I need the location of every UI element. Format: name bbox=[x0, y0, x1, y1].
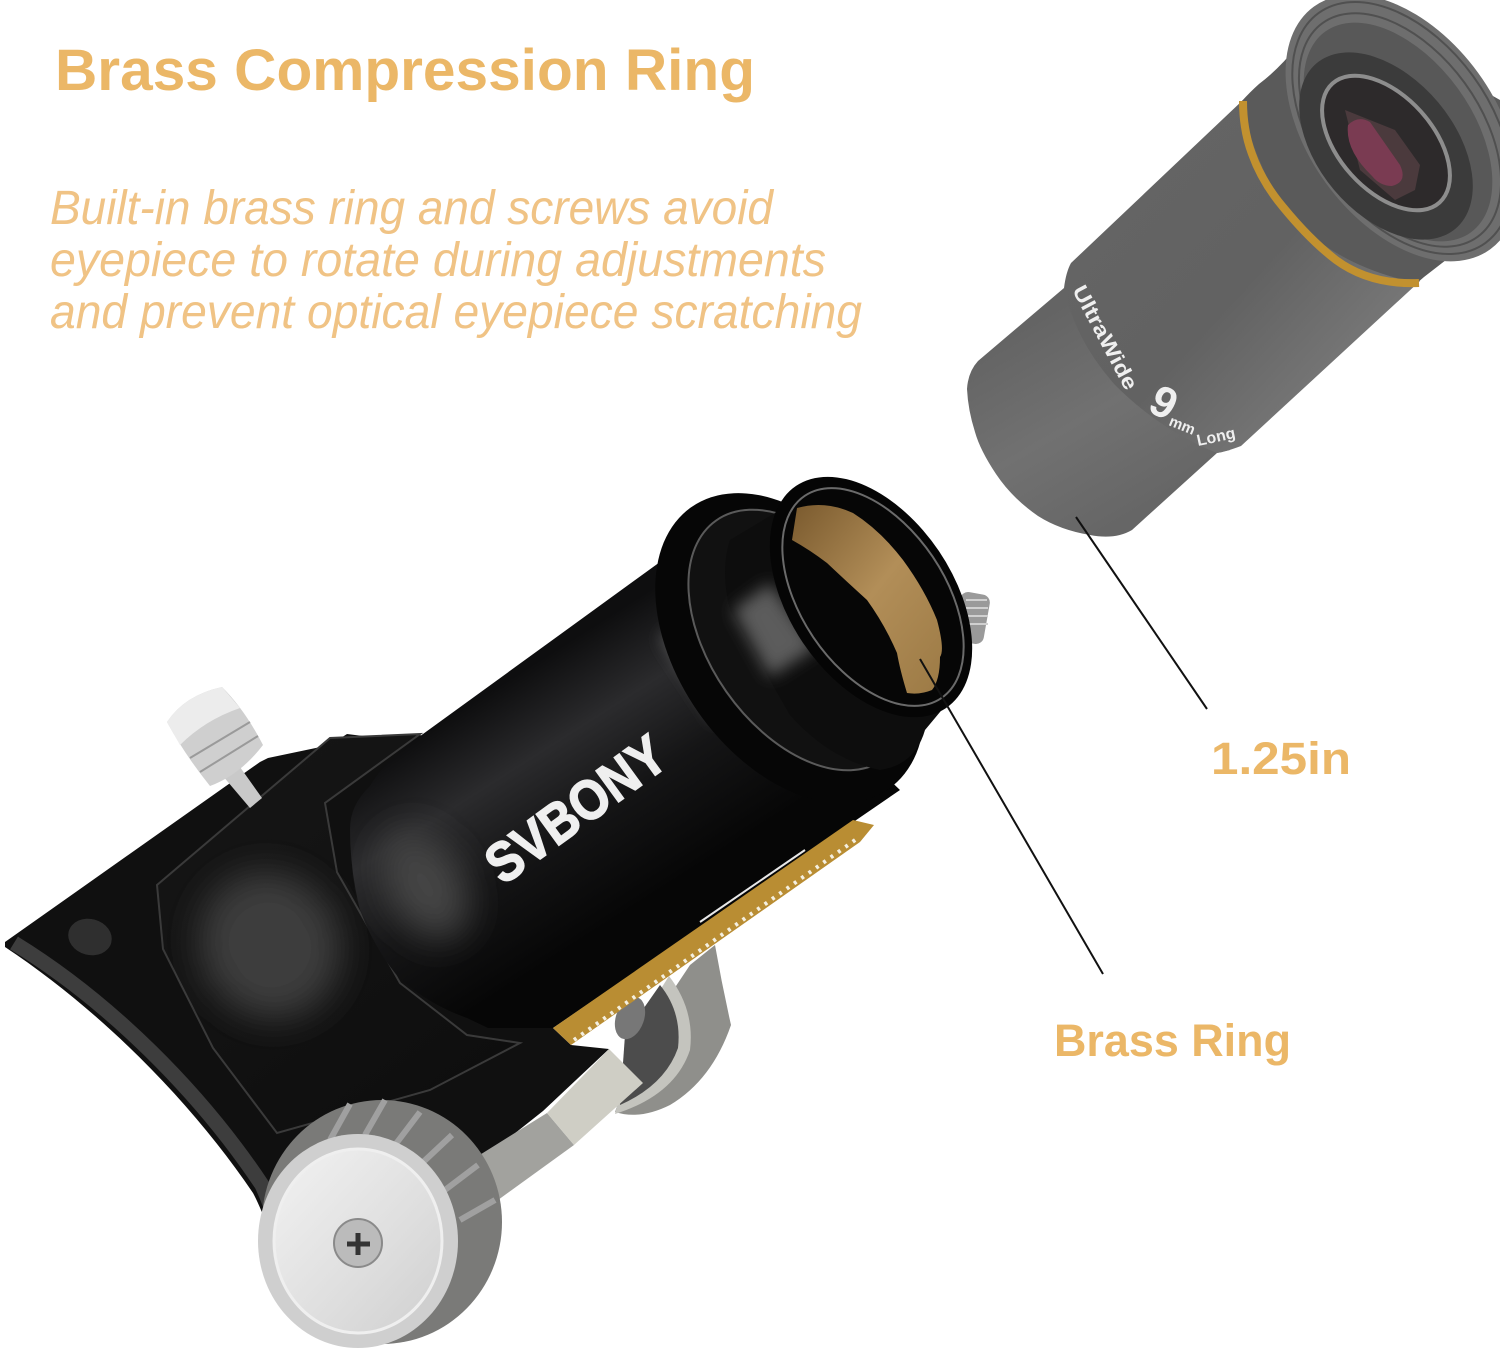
brass ring pointer line bbox=[920, 659, 1103, 974]
lens glass bbox=[1345, 110, 1420, 200]
metal bracket bbox=[478, 1049, 643, 1200]
flange collar bbox=[600, 443, 980, 853]
tube flange highlight bbox=[660, 618, 748, 722]
tube rear highlight bbox=[363, 816, 487, 954]
base casting bbox=[5, 734, 609, 1316]
eyepiece markings: Long bbox=[1195, 425, 1237, 450]
top thumb screw bbox=[167, 687, 263, 808]
collar barrel bbox=[725, 510, 950, 770]
front knob bbox=[258, 1100, 502, 1348]
description text bbox=[50, 182, 862, 339]
inner cup bbox=[1264, 20, 1500, 272]
eyepiece markings: UltraWide bbox=[1068, 282, 1142, 394]
screw hole bbox=[64, 914, 116, 960]
focuser illustration bbox=[5, 440, 1014, 1316]
brass ring label: Brass Ring bbox=[1054, 1015, 1291, 1066]
base edge band bbox=[14, 943, 300, 1312]
1.25in pointer line bbox=[1076, 517, 1207, 709]
lens reflection bbox=[1348, 119, 1403, 186]
brass ring bbox=[792, 505, 942, 694]
tube bbox=[350, 562, 900, 1028]
lower barrel bbox=[967, 288, 1230, 537]
side screw bbox=[953, 591, 991, 645]
rack gear bbox=[553, 820, 874, 1045]
rear knob bbox=[609, 945, 731, 1115]
description text: and prevent optical eyepiece scratching bbox=[50, 286, 862, 339]
eyepiece markings: 9 bbox=[1141, 376, 1186, 430]
eyepiece markings bbox=[1068, 282, 1237, 450]
eyepiece illustration bbox=[967, 0, 1500, 537]
top collar ring bbox=[728, 440, 1014, 754]
description text: Built-in brass ring and screws avoid bbox=[50, 182, 774, 235]
eyepiece markings: mm bbox=[1167, 413, 1198, 439]
description text: eyepiece to rotate during adjustments bbox=[50, 234, 826, 287]
rubber eyecup bbox=[1241, 4, 1500, 283]
collar highlight bbox=[733, 583, 817, 677]
title: Brass Compression Ring bbox=[55, 38, 755, 103]
SVBONY logo: SVBONY bbox=[473, 722, 678, 896]
lens ring bbox=[1298, 52, 1474, 234]
ring highlight bbox=[745, 456, 1001, 738]
eyecup ribs bbox=[1238, 0, 1500, 305]
1.25in label: 1.25in bbox=[1211, 733, 1351, 784]
casting highlight bbox=[172, 845, 368, 1045]
main barrel bbox=[1064, 100, 1420, 453]
gold ring bbox=[1243, 101, 1419, 283]
raised casting bbox=[157, 734, 520, 1133]
